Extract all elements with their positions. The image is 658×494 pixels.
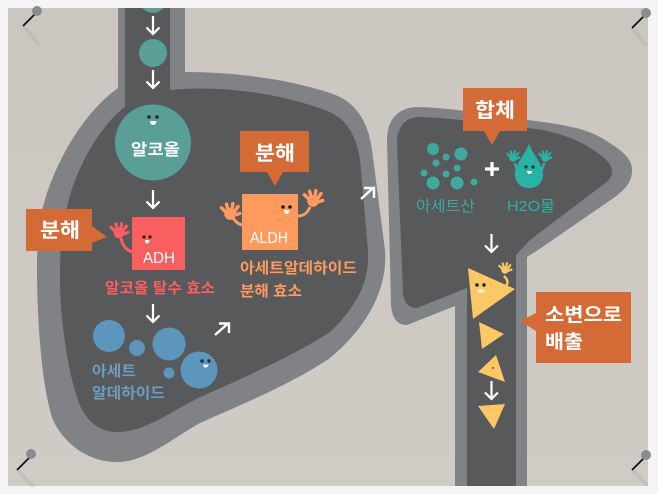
ALDH enzyme character xyxy=(221,191,323,250)
top teal circle xyxy=(142,8,164,13)
left organ: liver shape xyxy=(37,8,385,462)
callout: excreted in urine: 소변으로 xyxy=(545,304,622,326)
callout: break down left xyxy=(26,209,107,251)
right organ: stomach shape and exit tube xyxy=(387,107,632,486)
triangle 4 xyxy=(478,404,505,429)
callout: combine xyxy=(463,88,527,145)
alcohol character xyxy=(115,104,191,180)
arrow: down 1 xyxy=(146,16,160,34)
arrow: diagonal upper xyxy=(361,188,374,199)
label: ADH: ADH xyxy=(143,250,175,267)
label: acetaldehyde dehydrogenase: 분해 효소 xyxy=(240,283,302,300)
callout: break down right: 분해 xyxy=(255,142,295,165)
arrow: diagonal lower xyxy=(215,324,229,335)
label: acetaldehyde: 알데하이드 xyxy=(92,385,165,402)
label: alcohol dehydrogenase: 알코올 탈수 효소 xyxy=(105,280,215,297)
pin: bottom right xyxy=(632,450,651,484)
arrow: down 2 xyxy=(146,70,160,88)
arrow: down 4 xyxy=(146,304,160,322)
arrow: down 6 xyxy=(485,381,498,399)
pin: bottom left xyxy=(17,449,36,485)
label: alcohol: 알코올 xyxy=(131,141,180,159)
acetate triangle character xyxy=(468,263,515,319)
callout: excreted in urine: 배출 xyxy=(545,331,583,353)
label: ALDH: ALDH xyxy=(250,230,288,247)
plus sign xyxy=(485,162,499,176)
callout: excreted in urine xyxy=(520,292,631,363)
label: acetaldehyde: 아세트 xyxy=(92,363,136,380)
triangle 3 xyxy=(478,355,505,382)
label: H2O water: H2O물 xyxy=(507,198,555,215)
label: acetic acid: 아세트산 xyxy=(416,198,475,215)
ADH enzyme character xyxy=(111,217,185,270)
pin: top left xyxy=(23,6,42,43)
acetaldehyde bubbles xyxy=(93,320,218,388)
callout: combine: 합체 xyxy=(475,99,515,122)
water drop character xyxy=(507,144,551,188)
callout: break down left: 분해 xyxy=(40,219,80,242)
arrow: down 5 xyxy=(485,234,498,252)
acetic acid dots xyxy=(420,143,478,190)
arrow: down 3 xyxy=(146,190,160,208)
triangle 2 xyxy=(479,322,504,349)
pin: top right xyxy=(632,8,651,44)
callout: break down right xyxy=(240,131,309,186)
teal circle xyxy=(139,39,167,67)
label: acetaldehyde dehydrogenase: 아세트알데하이드 xyxy=(240,260,357,277)
